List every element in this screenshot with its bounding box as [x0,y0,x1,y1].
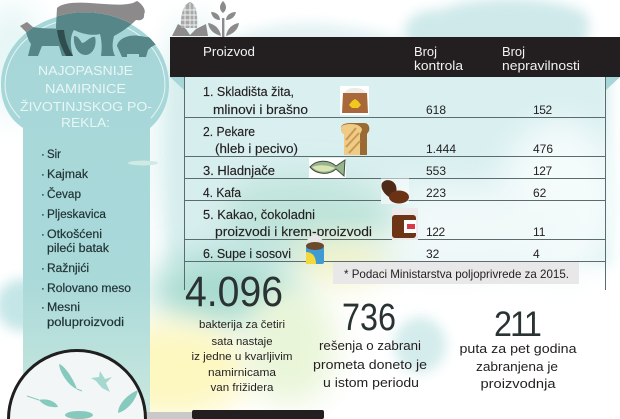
icon: corn [172,2,208,36]
stat: 4.096: 4.096 [185,268,283,316]
list: riskiest foods: · [41,302,45,314]
icon: chocolate spread jar [392,208,418,240]
table numbers: 127 [533,164,553,178]
magnifier lens [8,350,146,419]
stat: 736: u istom periodu [323,375,419,390]
panel background [1,13,169,419]
table numbers: 553 [426,164,446,178]
list: riskiest foods: Kajmak [47,169,88,181]
magnifier handle [144,410,324,419]
table rows: (hleb i pecivo) [215,142,298,156]
list: riskiest foods: · [41,229,45,241]
heading: animal products: NAMIRNICE [45,81,126,96]
stat: 736: rešenja o zabrani [319,338,421,353]
list: riskiest foods: Rolovano meso [47,283,131,295]
table rows: proizvodi i krem-proizvodi [215,225,372,239]
heading: animal products [20,63,152,130]
stat: 4.096: bakterija za četiri [199,319,285,331]
table numbers: 4 [533,247,540,261]
icon: coffee beans [381,178,409,204]
heading: animal products: NAJOPASNIJE [38,63,133,78]
list: riskiest foods: Čevap [47,188,81,201]
stat: 736: 736 [342,297,396,339]
table header: Broj [414,45,437,59]
stat: 4.096: namirnicama [208,367,277,379]
list: riskiest foods [41,149,131,329]
list: riskiest foods: · [41,189,45,201]
table rows: 3. Hladnjače [203,164,275,178]
icon: magnifying glass with bacteria [8,350,324,419]
stat: 736 [313,297,427,390]
stat: 211: 211 [494,305,540,344]
list: riskiest foods: · [41,263,45,275]
table numbers: 223 [426,186,446,200]
icon: soup can [306,235,325,264]
bacteria [27,364,138,419]
stat: 4.096: iz jedne u kvarljivim [192,351,292,363]
table numbers [426,103,553,261]
table numbers: 122 [426,225,446,239]
table numbers: 476 [533,142,553,156]
table rows: 1. Skladišta žita, [203,85,294,99]
list: riskiest foods: Ražnjići [47,263,89,275]
stat: 4.096: van frižidera [210,382,274,394]
list: riskiest foods: · [41,283,45,295]
table header [170,37,620,77]
panel: animal products [1,1,169,419]
table grid [184,77,606,290]
heading: animal products: ŽIVOTINJSKOG PO- [20,99,152,114]
stat: 211 [460,305,577,391]
table rows: 6. Supe i sosovi [203,247,291,261]
list: riskiest foods: Pljeskavica [47,209,107,221]
footnote: * Podaci Ministarstva poljoprivrede za 2015. [344,267,569,281]
table header: Proizvod [203,45,255,59]
table header: Broj [502,45,525,59]
list: riskiest foods: · [41,149,45,161]
list: riskiest foods: Otkošćeni [47,229,102,241]
table header: nepravilnosti [502,59,580,73]
table numbers: 62 [533,186,547,200]
list: riskiest foods: poluproizvodi [47,317,124,329]
table header: kontrola [414,59,463,73]
stat: 4.096 [185,268,292,394]
table numbers: 11 [533,225,546,239]
stat: 211: proizvodnja [480,377,556,391]
list: riskiest foods: pileći batak [47,243,109,255]
icon: wheat [208,1,239,37]
table rows: mlinovi i brašno [213,103,308,117]
table numbers: 152 [533,103,553,117]
table numbers: 32 [426,247,440,261]
stat: 736: prometa doneto je [313,357,427,372]
table rows: 4. Kafa [203,186,241,200]
stat: 211: puta za pet godina [460,342,577,356]
list: riskiest foods: Mesni [47,302,80,314]
icon: flour sack [340,86,369,115]
table: inspections [170,37,620,290]
table numbers: 618 [426,103,446,117]
icon: toast [341,123,369,155]
stat: 4.096: sata nastaje [212,336,272,348]
table rows [203,85,372,261]
footnote [333,262,579,284]
icon: fish [309,158,346,178]
heading: animal products: REKLA: [61,115,110,130]
table rows: 2. Pekare [203,125,255,139]
table rows: 5. Kakao, čokoladni [203,208,315,222]
list: riskiest foods: · [41,209,45,221]
stat: 211: zabranjena je [476,360,558,374]
list: riskiest foods: · [41,169,45,181]
list: riskiest foods: Sir [47,149,61,161]
icon: farm animals [20,1,157,57]
table numbers: 1.444 [426,142,456,156]
